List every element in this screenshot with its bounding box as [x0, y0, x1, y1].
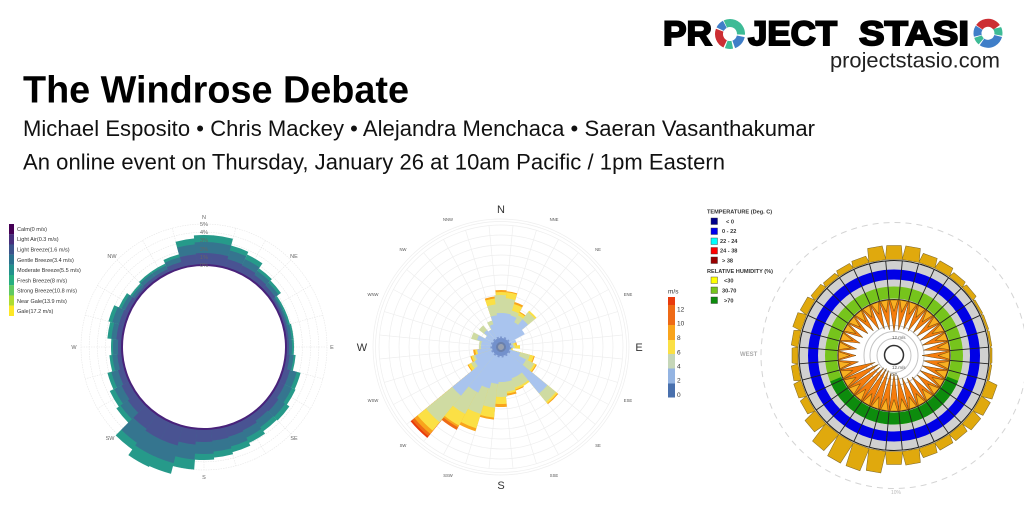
legend: temperature and relative humidity: 24 - 38	[720, 248, 737, 254]
legend: colour bar in metres per second: 10	[677, 320, 685, 328]
legend: colour bar in metres per second: 12	[677, 306, 685, 314]
legend: temperature and relative humidity: 0 - 22	[722, 229, 736, 235]
legend: Beaufort wind classes: Strong Breeze(10.8 m/s)	[17, 288, 77, 294]
sectors: light breeze band	[128, 271, 280, 423]
chart centre and speed labels: 0.0	[891, 372, 898, 377]
legend: temperature and relative humidity: 22 - 24	[720, 239, 738, 245]
legend: Beaufort wind classes: Moderate Breeze(5.5 m/s)	[17, 268, 81, 274]
outer frequency ring and labels: WEST	[740, 352, 758, 358]
compass labels: WNW	[368, 292, 379, 297]
legend: temperature and relative humidity: <30	[724, 278, 734, 284]
legend: colour bar in metres per second	[668, 288, 685, 399]
legend: temperature and relative humidity: < 0	[726, 220, 734, 226]
chart: wind rose stacked sectors	[411, 257, 591, 437]
title: The Windrose Debate	[23, 70, 409, 112]
compass labels: N	[497, 204, 505, 216]
compass and percent labels: 2%	[200, 247, 208, 253]
icon: logo ring O one	[715, 19, 745, 49]
legend: temperature and relative humidity: > 38	[722, 258, 733, 264]
compass and percent labels: SW	[106, 436, 115, 442]
outer frequency ring and labels	[740, 222, 1024, 496]
compass labels: NNE	[550, 217, 559, 222]
chart: temperature and humidity rings	[799, 260, 989, 450]
chart centre and speed labels: 12.m/s	[892, 365, 906, 370]
compass and percent labels: N	[202, 215, 206, 221]
compass and percent labels: NE	[290, 254, 298, 260]
legend: temperature and relative humidity: >70	[724, 298, 734, 304]
legend: colour bar in metres per second: 4	[677, 364, 681, 370]
compass labels: NE	[595, 247, 601, 252]
outer frequency ring and labels: 10%	[891, 490, 902, 496]
sectors: moderate breeze band	[106, 249, 302, 445]
compass and percent labels: 1%	[200, 255, 208, 261]
compass labels: E	[635, 342, 643, 354]
legend: colour bar in metres per second: 0	[677, 392, 681, 399]
legend: Beaufort wind classes: Light Breeze(1.6 m/s)	[17, 248, 70, 254]
chart: gold spike bases	[838, 300, 950, 411]
logo wordmark: PR	[663, 15, 712, 53]
sectors: sage band	[426, 272, 576, 422]
legend: temperature and relative humidity	[707, 210, 773, 304]
legend: Beaufort wind classes: Calm(0 m/s)	[17, 227, 47, 233]
logo url: projectstasio.com	[830, 48, 1000, 72]
legend: temperature and relative humidity: RELATIVE HUMIDITY (%)	[707, 269, 773, 275]
chart: orange wind speed spikes	[838, 300, 950, 411]
legend: temperature and relative humidity: 30-70	[722, 288, 736, 294]
chart centre and speed labels	[884, 335, 906, 377]
chart centre and speed labels: 12.m/s	[892, 335, 906, 340]
legend: colour bar in metres per second: 2	[677, 378, 681, 384]
compass labels: ESE	[624, 398, 632, 403]
speakers: Michael Esposito • Chris Mackey • Alejandra Menchaca • Saeran Vasanthakumar	[23, 116, 815, 141]
sectors: red band	[411, 257, 591, 437]
compass and percent labels	[71, 215, 334, 481]
compass labels	[357, 204, 643, 492]
legend: Beaufort wind classes: Light Air(0.3 m/s)	[17, 237, 59, 243]
legend: colour bar in metres per second: m/s	[668, 288, 679, 296]
chart grid: rings and spokes	[373, 219, 629, 475]
compass and percent labels: SE	[290, 436, 298, 442]
legend: Beaufort wind classes	[9, 224, 81, 316]
compass and percent labels: W	[71, 345, 77, 351]
compass labels: SE	[595, 443, 601, 448]
chart: wind rose stacked sectors	[106, 249, 302, 445]
logo wordmark: STASI	[859, 15, 969, 53]
compass and percent labels: S	[202, 475, 206, 481]
panel: windrose three, temperature and humidity	[707, 210, 1024, 496]
legend: colour bar in metres per second: 6	[677, 350, 681, 356]
event details: An online event on Thursday, January 26 at 10am Pacific / 1pm Eastern	[23, 150, 725, 174]
compass labels: SSW	[443, 473, 453, 478]
sectors: dark orange band	[412, 258, 590, 436]
compass and percent labels: 0%	[200, 263, 208, 269]
legend: colour bar in metres per second: 8	[677, 335, 681, 342]
icon: logo ring O two	[973, 19, 1003, 48]
legend: Beaufort wind classes: Near Gale(13.9 m/s)	[17, 299, 67, 305]
compass labels: SSE	[550, 473, 558, 478]
compass labels: WSW	[368, 398, 378, 403]
compass labels: W	[357, 342, 368, 354]
legend: Beaufort wind classes: Gentle Breeze(3.4 m/s)	[17, 258, 74, 264]
chart: frequency bars	[791, 246, 997, 473]
sectors: gentle breeze band	[115, 258, 293, 436]
compass and percent labels: NW	[107, 254, 117, 260]
panel: windrose one, Beaufort scale	[9, 215, 334, 481]
calm ring and white centre	[115, 258, 293, 436]
legend: Beaufort wind classes: Fresh Breeze(8 m/s)	[17, 278, 67, 284]
legend: temperature and relative humidity: TEMPERATURE (Deg. C)	[707, 210, 772, 216]
logo wordmark	[663, 15, 969, 53]
compass labels: NW	[400, 247, 407, 252]
compass and percent labels: 4%	[200, 230, 208, 236]
legend: Beaufort wind classes: Gale(17.2 m/s)	[17, 309, 54, 315]
panel: windrose two, speed frequency	[357, 204, 685, 492]
compass and percent labels: E	[330, 345, 334, 351]
compass labels: NNW	[443, 217, 453, 222]
calm centre	[491, 337, 511, 357]
chart grid: dashed rings and spokes	[81, 224, 327, 470]
sectors: yellow band	[418, 264, 584, 430]
logo wordmark: JECT	[748, 15, 837, 53]
logo: Project Stasio	[663, 15, 1003, 72]
sectors: orange band	[414, 260, 588, 434]
compass and percent labels: 3%	[200, 238, 208, 244]
compass labels: ENE	[624, 292, 633, 297]
compass labels: SW	[400, 443, 406, 448]
compass and percent labels: 5%	[200, 222, 208, 228]
compass labels: S	[497, 480, 505, 492]
sectors: light blue band	[452, 298, 550, 396]
